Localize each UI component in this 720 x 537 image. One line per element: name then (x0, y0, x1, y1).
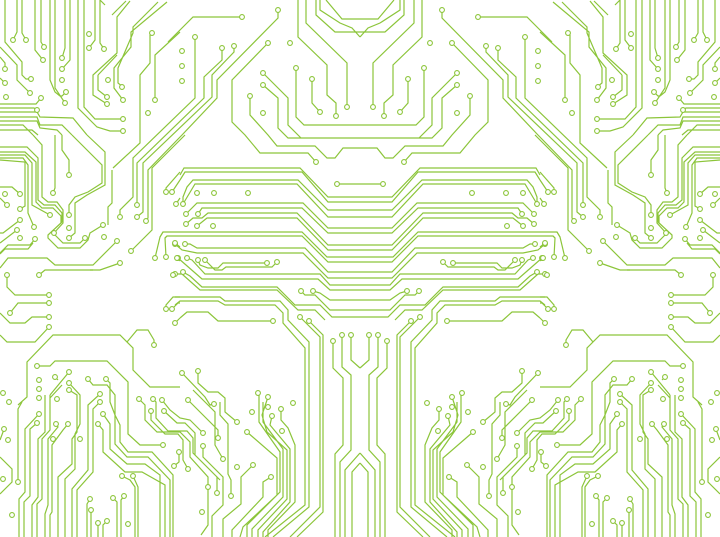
traces: bottom-middle cluster (137, 369, 295, 537)
traces: top-left cluster (0, 0, 180, 135)
left half of circuit pattern (0, 0, 360, 537)
traces: tree trunk (175, 297, 360, 537)
traces: tree canopy band (160, 168, 360, 320)
traces: side connectors (0, 270, 180, 405)
traces: top-centre cluster (108, 0, 360, 251)
traces: bottom-left cluster (0, 370, 173, 537)
right half of circuit pattern (mirror image) (360, 0, 720, 537)
traces: left band and middle-left cluster (0, 135, 180, 270)
